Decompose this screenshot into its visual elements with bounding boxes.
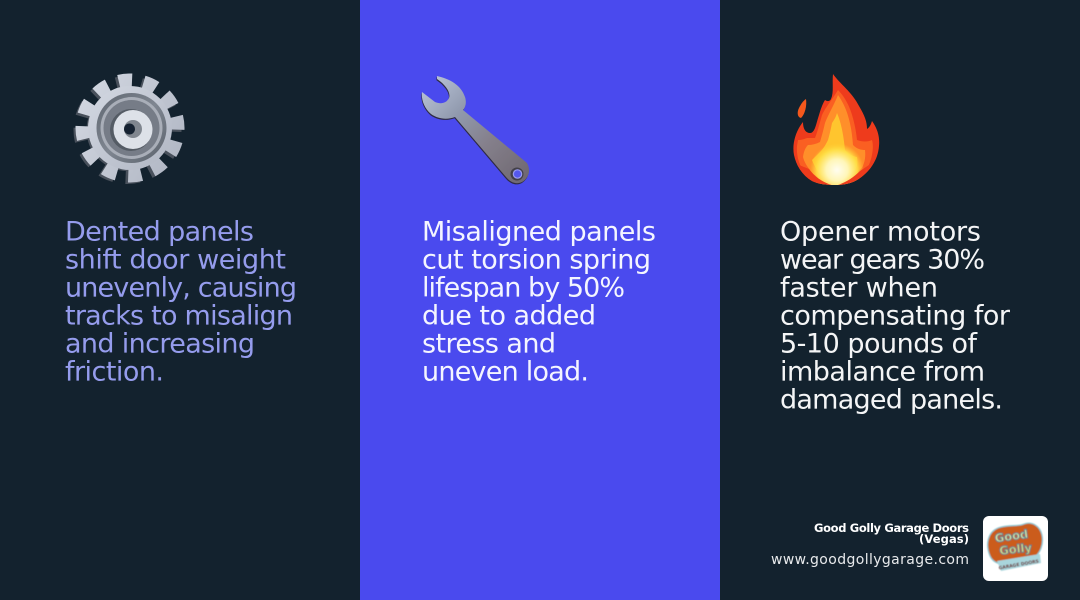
text block: misaligned panels: cut torsion spring xyxy=(422,244,651,276)
footer: logo: Good xyxy=(994,527,1029,545)
text block: dented panels: Dented panels xyxy=(65,216,254,248)
text block: opener motors: compensating for xyxy=(780,300,1011,332)
footer: company name: Good Golly Garage Doors xyxy=(814,521,969,535)
text block: dented panels: and increasing xyxy=(65,328,255,360)
icon: wrench xyxy=(421,76,529,184)
text block: opener motors: damaged panels. xyxy=(780,384,1003,416)
text block: misaligned panels: Misaligned panels xyxy=(422,216,656,248)
text block: opener motors: imbalance from xyxy=(780,356,985,388)
text block: dented panels: friction. xyxy=(65,356,164,388)
footer: logo: GARAGE DOORS xyxy=(998,559,1039,571)
text block: opener motors: faster when xyxy=(780,272,938,304)
text block: opener motors: 5-10 pounds of xyxy=(780,328,978,360)
text block: misaligned panels: stress and xyxy=(422,328,556,360)
text block: misaligned panels: uneven load. xyxy=(422,356,589,388)
text block: opener motors: Opener motors xyxy=(780,216,981,248)
panel: middle background xyxy=(360,0,720,600)
footer: logo xyxy=(983,516,1048,581)
text block: dented panels: unevenly, causing xyxy=(65,272,297,304)
text block: misaligned panels: lifespan by 50% xyxy=(422,272,625,304)
icon: gear xyxy=(72,72,186,186)
panel: right background xyxy=(720,0,1080,600)
footer: company name: (Vegas) xyxy=(919,532,969,546)
panel: left background xyxy=(0,0,360,600)
icon: flame xyxy=(793,74,879,197)
footer: website: www.goodgollygarage.com xyxy=(771,552,969,568)
footer: logo: Golly xyxy=(999,540,1033,558)
text block: misaligned panels: due to added xyxy=(422,300,596,332)
text block: dented panels: shift door weight xyxy=(65,244,286,276)
text block: dented panels: tracks to misalign xyxy=(65,300,293,332)
text block: opener motors: wear gears 30% xyxy=(780,244,985,276)
